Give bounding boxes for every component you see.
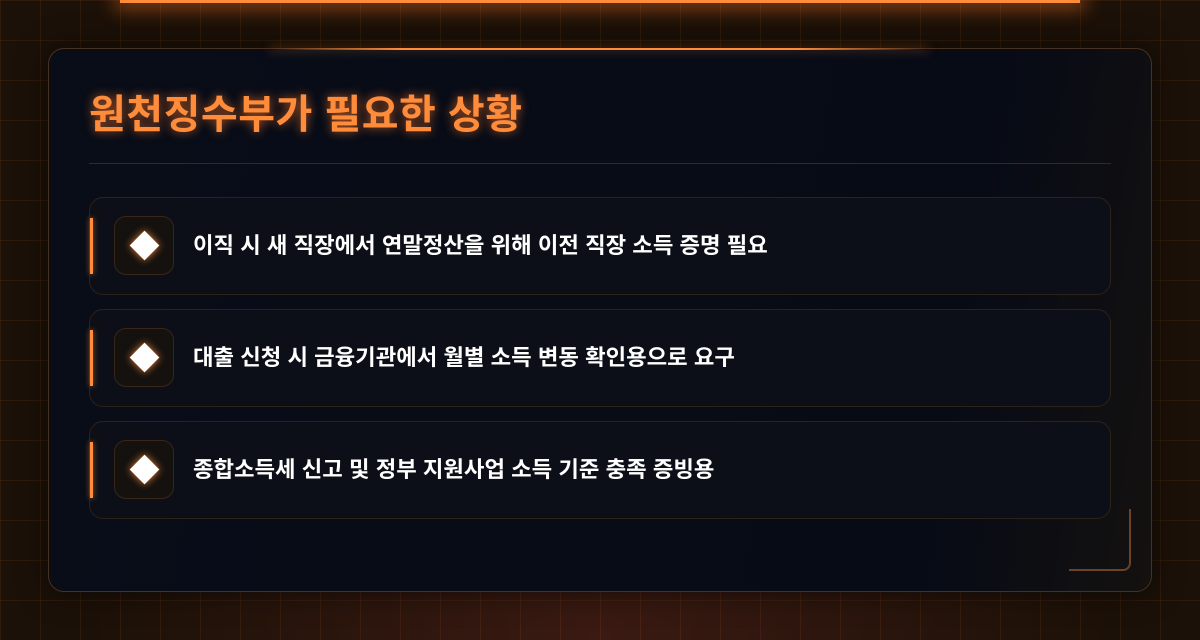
item 2 bbox=[89, 309, 1111, 407]
icon: diamond bbox=[114, 440, 174, 499]
icon: diamond bbox=[114, 216, 174, 275]
text: item 1: 이직 시 새 직장에서 연말정산을 위해 이전 직장 소득 증명 필요 bbox=[193, 233, 768, 258]
panel: main card bbox=[48, 48, 1152, 592]
text: item 3: 종합소득세 신고 및 정부 지원사업 소득 기준 충족 증빙용 bbox=[193, 457, 714, 482]
icon: diamond bbox=[114, 328, 174, 387]
item 3 bbox=[89, 421, 1111, 519]
item 1 bbox=[89, 197, 1111, 295]
title: 원천징수부가 필요한 상황 bbox=[89, 93, 523, 137]
text: item 2: 대출 신청 시 금융기관에서 월별 소득 변동 확인용으로 요구 bbox=[193, 345, 735, 370]
